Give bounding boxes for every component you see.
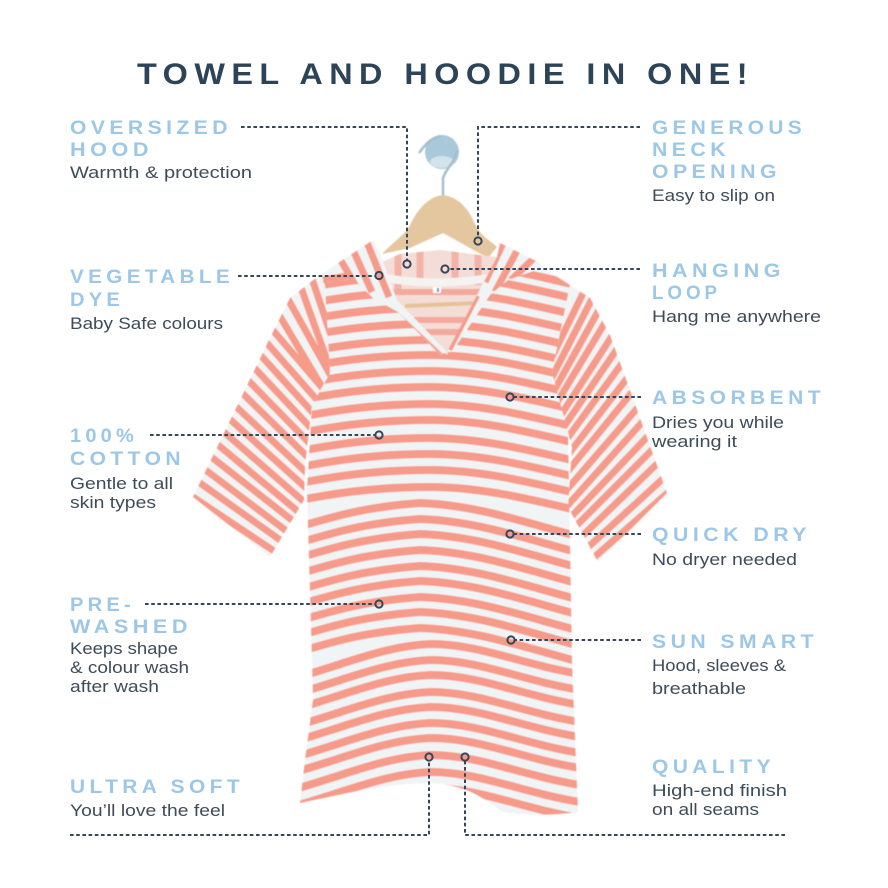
callout: vegetable dye: VEGETABLE — [70, 267, 234, 288]
callout: ultra soft: You’ll love the feel — [70, 801, 225, 820]
callout: vegetable dye: Baby Safe colours — [70, 314, 223, 333]
title: TOWEL AND HOODIE IN ONE! — [137, 58, 754, 91]
illustration: striped hoodie — [185, 236, 673, 822]
callout: sun smart: Hood, sleeves & — [652, 656, 787, 675]
callout: absorbent: Dries you while — [652, 413, 784, 432]
callout: generous neck opening: GENEROUS — [652, 118, 806, 139]
callout: quality — [461, 753, 787, 835]
callout: vegetable dye — [70, 267, 383, 333]
neck interior — [383, 250, 496, 356]
hanger wood — [382, 195, 497, 258]
callout: ultra soft — [70, 753, 433, 835]
callout: generous neck opening: NECK — [652, 140, 730, 161]
callout: generous neck opening — [474, 118, 806, 245]
callout: oversized hood: OVERSIZED — [70, 118, 232, 139]
callout: quality: QUALITY — [652, 757, 775, 778]
callout: pre-washed: WASHED — [70, 617, 192, 638]
callout: quality: High-end finish — [652, 781, 787, 800]
right sleeve — [552, 286, 668, 561]
callout: pre-washed: PRE- — [70, 595, 135, 616]
callout: oversized hood: Warmth & protection — [70, 163, 252, 182]
callout: generous neck opening: Easy to slip on — [652, 186, 775, 205]
callout: quick dry: QUICK DRY — [652, 525, 811, 546]
callout: ultra soft: ULTRA SOFT — [70, 777, 244, 798]
callout: 100% cotton: COTTON — [70, 449, 185, 470]
callout: hanging loop: HANGING — [652, 261, 785, 282]
callout: 100% cotton: skin types — [70, 493, 156, 512]
callout: 100% cotton — [70, 426, 383, 512]
callout: vegetable dye: DYE — [70, 290, 124, 311]
icon: hanger hook disc — [419, 135, 459, 196]
callout: sun smart: SUN SMART — [652, 632, 818, 653]
callout: hanging loop — [441, 261, 821, 326]
illustration: hanger — [382, 135, 497, 258]
hood right side — [447, 242, 540, 353]
callout: absorbent: wearing it — [651, 432, 737, 451]
callout: quick dry — [506, 525, 811, 569]
callout: pre-washed: after wash — [70, 677, 159, 696]
hoodie body — [295, 240, 585, 822]
callout: pre-washed: & colour wash — [70, 658, 189, 677]
left sleeve — [192, 276, 330, 556]
callout: oversized hood — [70, 118, 411, 268]
callout: sun smart: breathable — [652, 679, 746, 698]
callout: generous neck opening: OPENING — [652, 162, 781, 183]
callout: quick dry: No dryer needed — [652, 550, 797, 569]
callout: pre-washed: Keeps shape — [70, 639, 178, 658]
callout: 100% cotton: Gentle to all — [70, 474, 173, 493]
callout: oversized hood: HOOD — [70, 140, 153, 161]
callout: quality: on all seams — [652, 800, 759, 819]
callout: 100% cotton: 100% — [70, 426, 138, 447]
hood left side — [321, 240, 447, 356]
callout: hanging loop: LOOP — [652, 283, 721, 304]
callout: pre-washed — [70, 595, 383, 696]
callout: absorbent: ABSORBENT — [652, 388, 825, 409]
callout: hanging loop: Hang me anywhere — [652, 307, 821, 326]
callout: sun smart — [507, 632, 818, 698]
callout: absorbent — [506, 388, 825, 451]
